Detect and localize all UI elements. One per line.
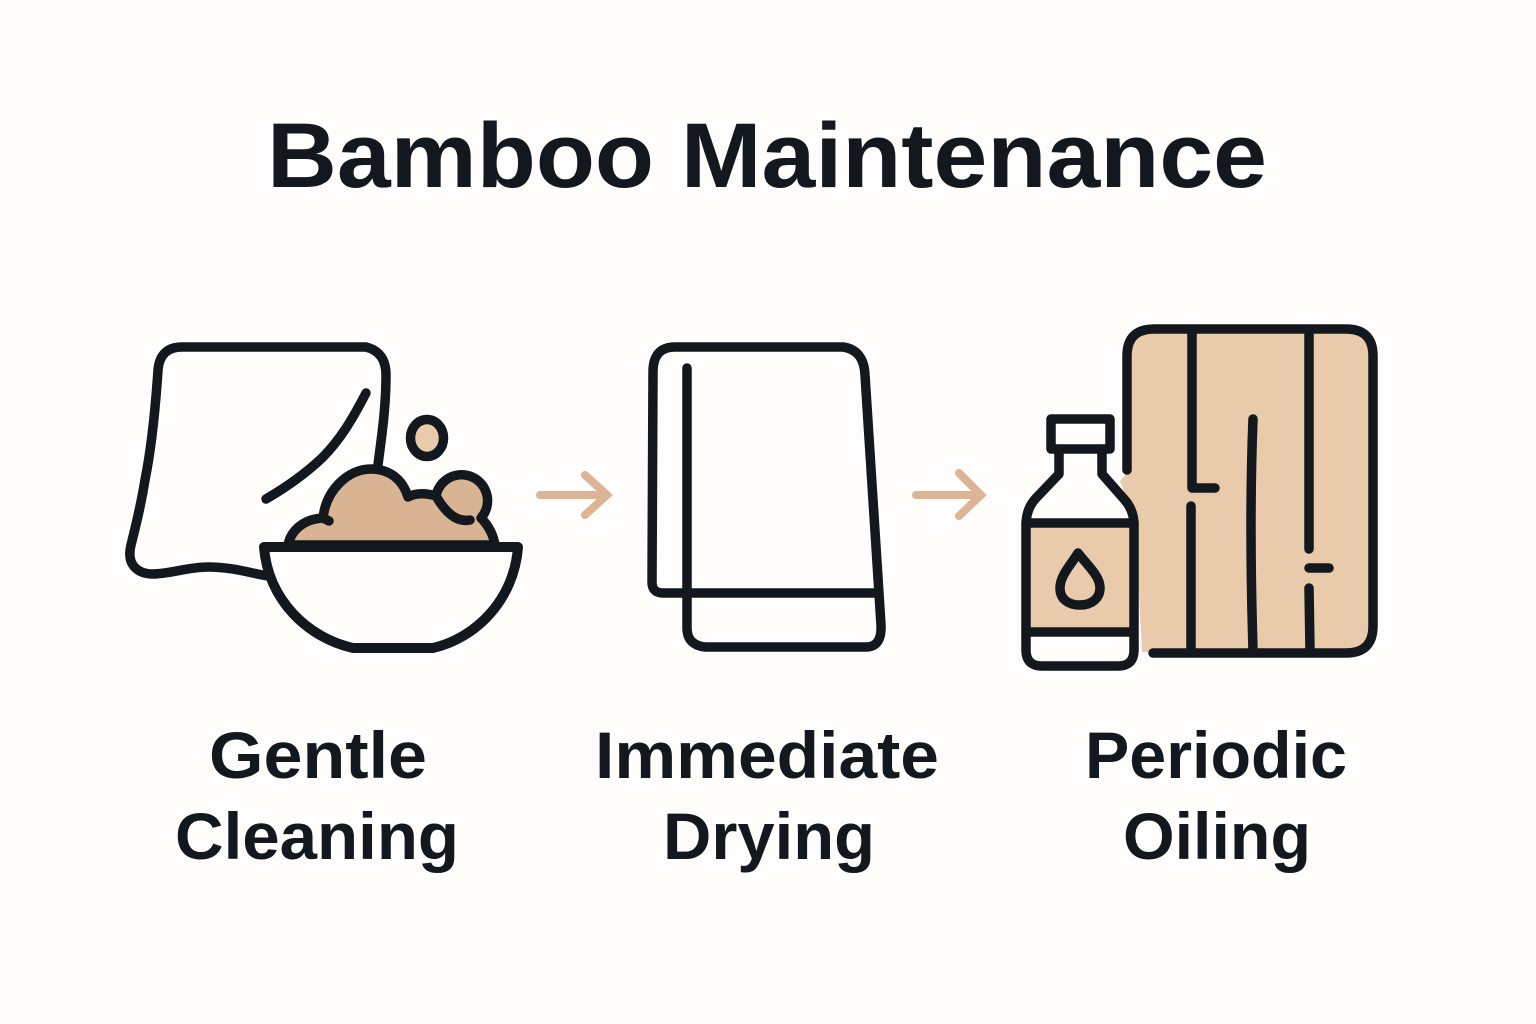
arrow 2 — [916, 473, 981, 516]
label: Periodic Oiling: Oiling — [1123, 799, 1311, 873]
arrow 1 — [540, 475, 607, 515]
label: Periodic Oiling: Periodic — [1085, 718, 1347, 792]
icon: folded towel — [652, 347, 881, 647]
label: Immediate Drying — [595, 718, 939, 873]
label: Gentle Cleaning — [175, 718, 459, 873]
label: Gentle Cleaning: Gentle — [209, 718, 427, 792]
label: Gentle Cleaning: Cleaning — [175, 799, 459, 873]
label: Periodic Oiling — [1085, 718, 1347, 873]
title: Bamboo Maintenance — [267, 105, 1267, 207]
icon: cloth and soap bowl — [130, 347, 518, 648]
label: Immediate Drying: Immediate — [595, 718, 939, 792]
label: Immediate Drying: Drying — [663, 799, 875, 873]
icon: oil bottle and bamboo board — [1026, 329, 1373, 666]
